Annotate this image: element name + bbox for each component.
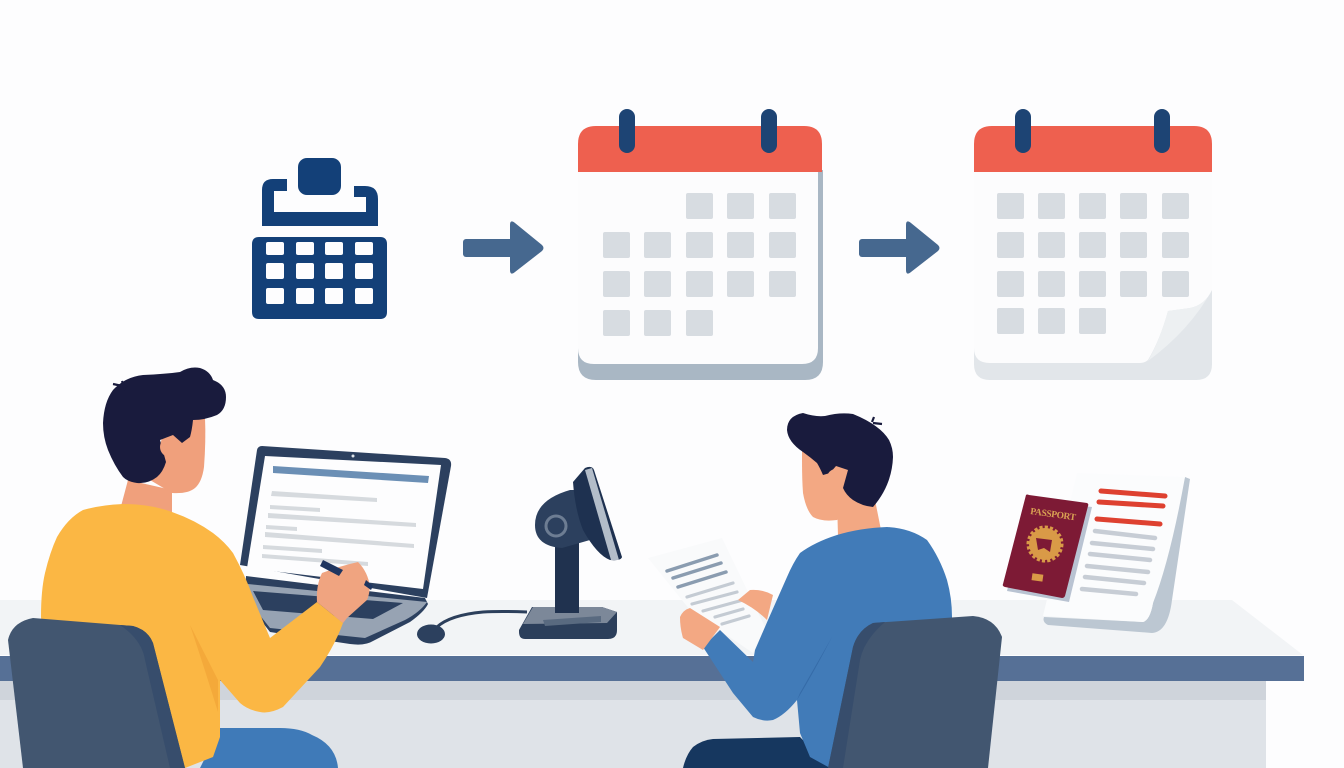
person: left, with yellow sweater [41,368,373,768]
laptop [240,446,451,645]
hair [103,368,226,483]
sweater [703,527,952,768]
document: paper with checklist [1043,473,1190,633]
arrow: second [859,221,940,274]
document: held paper [648,538,765,653]
passport [1003,494,1092,602]
ear [827,469,845,487]
icon: navy calendar [252,158,387,319]
neck [120,480,172,514]
pen [320,560,343,576]
person: right, with blue sweater [680,413,952,768]
trousers [683,737,830,768]
calendar: right with curled page [974,109,1212,380]
chair: right [828,616,1002,768]
desk [0,600,1304,768]
arrow: first [463,221,544,274]
hand [317,562,370,623]
ear [160,437,180,457]
face [802,445,860,521]
neck [837,500,881,536]
chair: left [8,618,185,768]
left hand [680,608,720,650]
sweater [41,504,343,768]
hair [787,413,893,507]
passport: PASSPORT [1030,507,1077,523]
calendar: middle [578,109,823,380]
trousers [200,728,338,768]
face [150,410,205,493]
microphone / webcam device [417,467,622,644]
right hand [738,590,773,620]
